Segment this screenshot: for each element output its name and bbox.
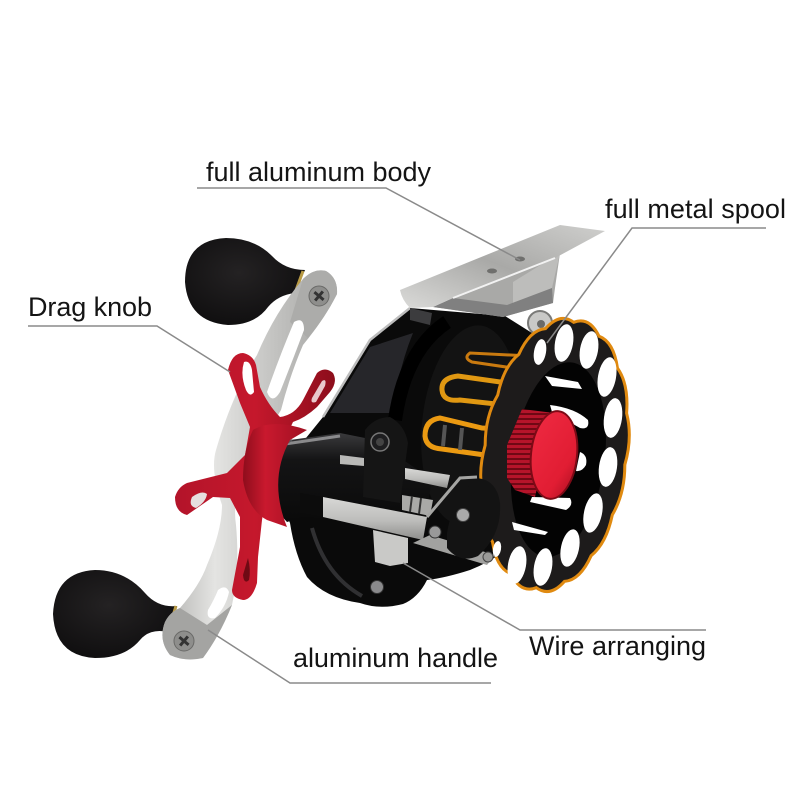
callout: full metal spool: full metal spool (605, 194, 786, 224)
reel body (272, 308, 545, 607)
red collar (243, 424, 307, 527)
black line-guide arm (363, 417, 408, 503)
icon: black handle knob (413, 477, 500, 565)
callout: Wire arranging (403, 563, 706, 661)
icon: lower handle screw (174, 631, 194, 651)
aluminum handle plate (162, 270, 337, 659)
red spool cap knob (507, 409, 581, 501)
icon: body screw (370, 580, 384, 594)
callout: full metal spool (547, 194, 786, 343)
callout: aluminum handle (208, 630, 498, 683)
wire arranging silver rod (300, 493, 427, 566)
red star drag knob (175, 353, 335, 600)
icon: lower handle foam knob (53, 570, 177, 658)
callout: Wire arranging: Wire arranging (529, 631, 706, 661)
callout: full aluminum body (197, 157, 520, 260)
icon: upper handle screw (309, 286, 329, 306)
icon: upper handle foam knob (185, 238, 305, 325)
callout: Drag knob: Drag knob (28, 292, 152, 322)
gear housing (268, 433, 432, 522)
upper silver rod (340, 455, 450, 516)
foot: full aluminum body mount (400, 225, 605, 325)
spool slits (512, 376, 588, 535)
icon: bearing roller (528, 311, 552, 335)
spool holes (492, 323, 625, 587)
full metal spool (465, 310, 645, 600)
callout: aluminum handle: aluminum handle (293, 643, 498, 673)
callout: Drag knob (28, 292, 230, 372)
callout: full aluminum body: full aluminum body (206, 157, 432, 187)
orange spool cage loops (425, 353, 544, 455)
spool ring with orange scalloped rim (465, 310, 645, 600)
